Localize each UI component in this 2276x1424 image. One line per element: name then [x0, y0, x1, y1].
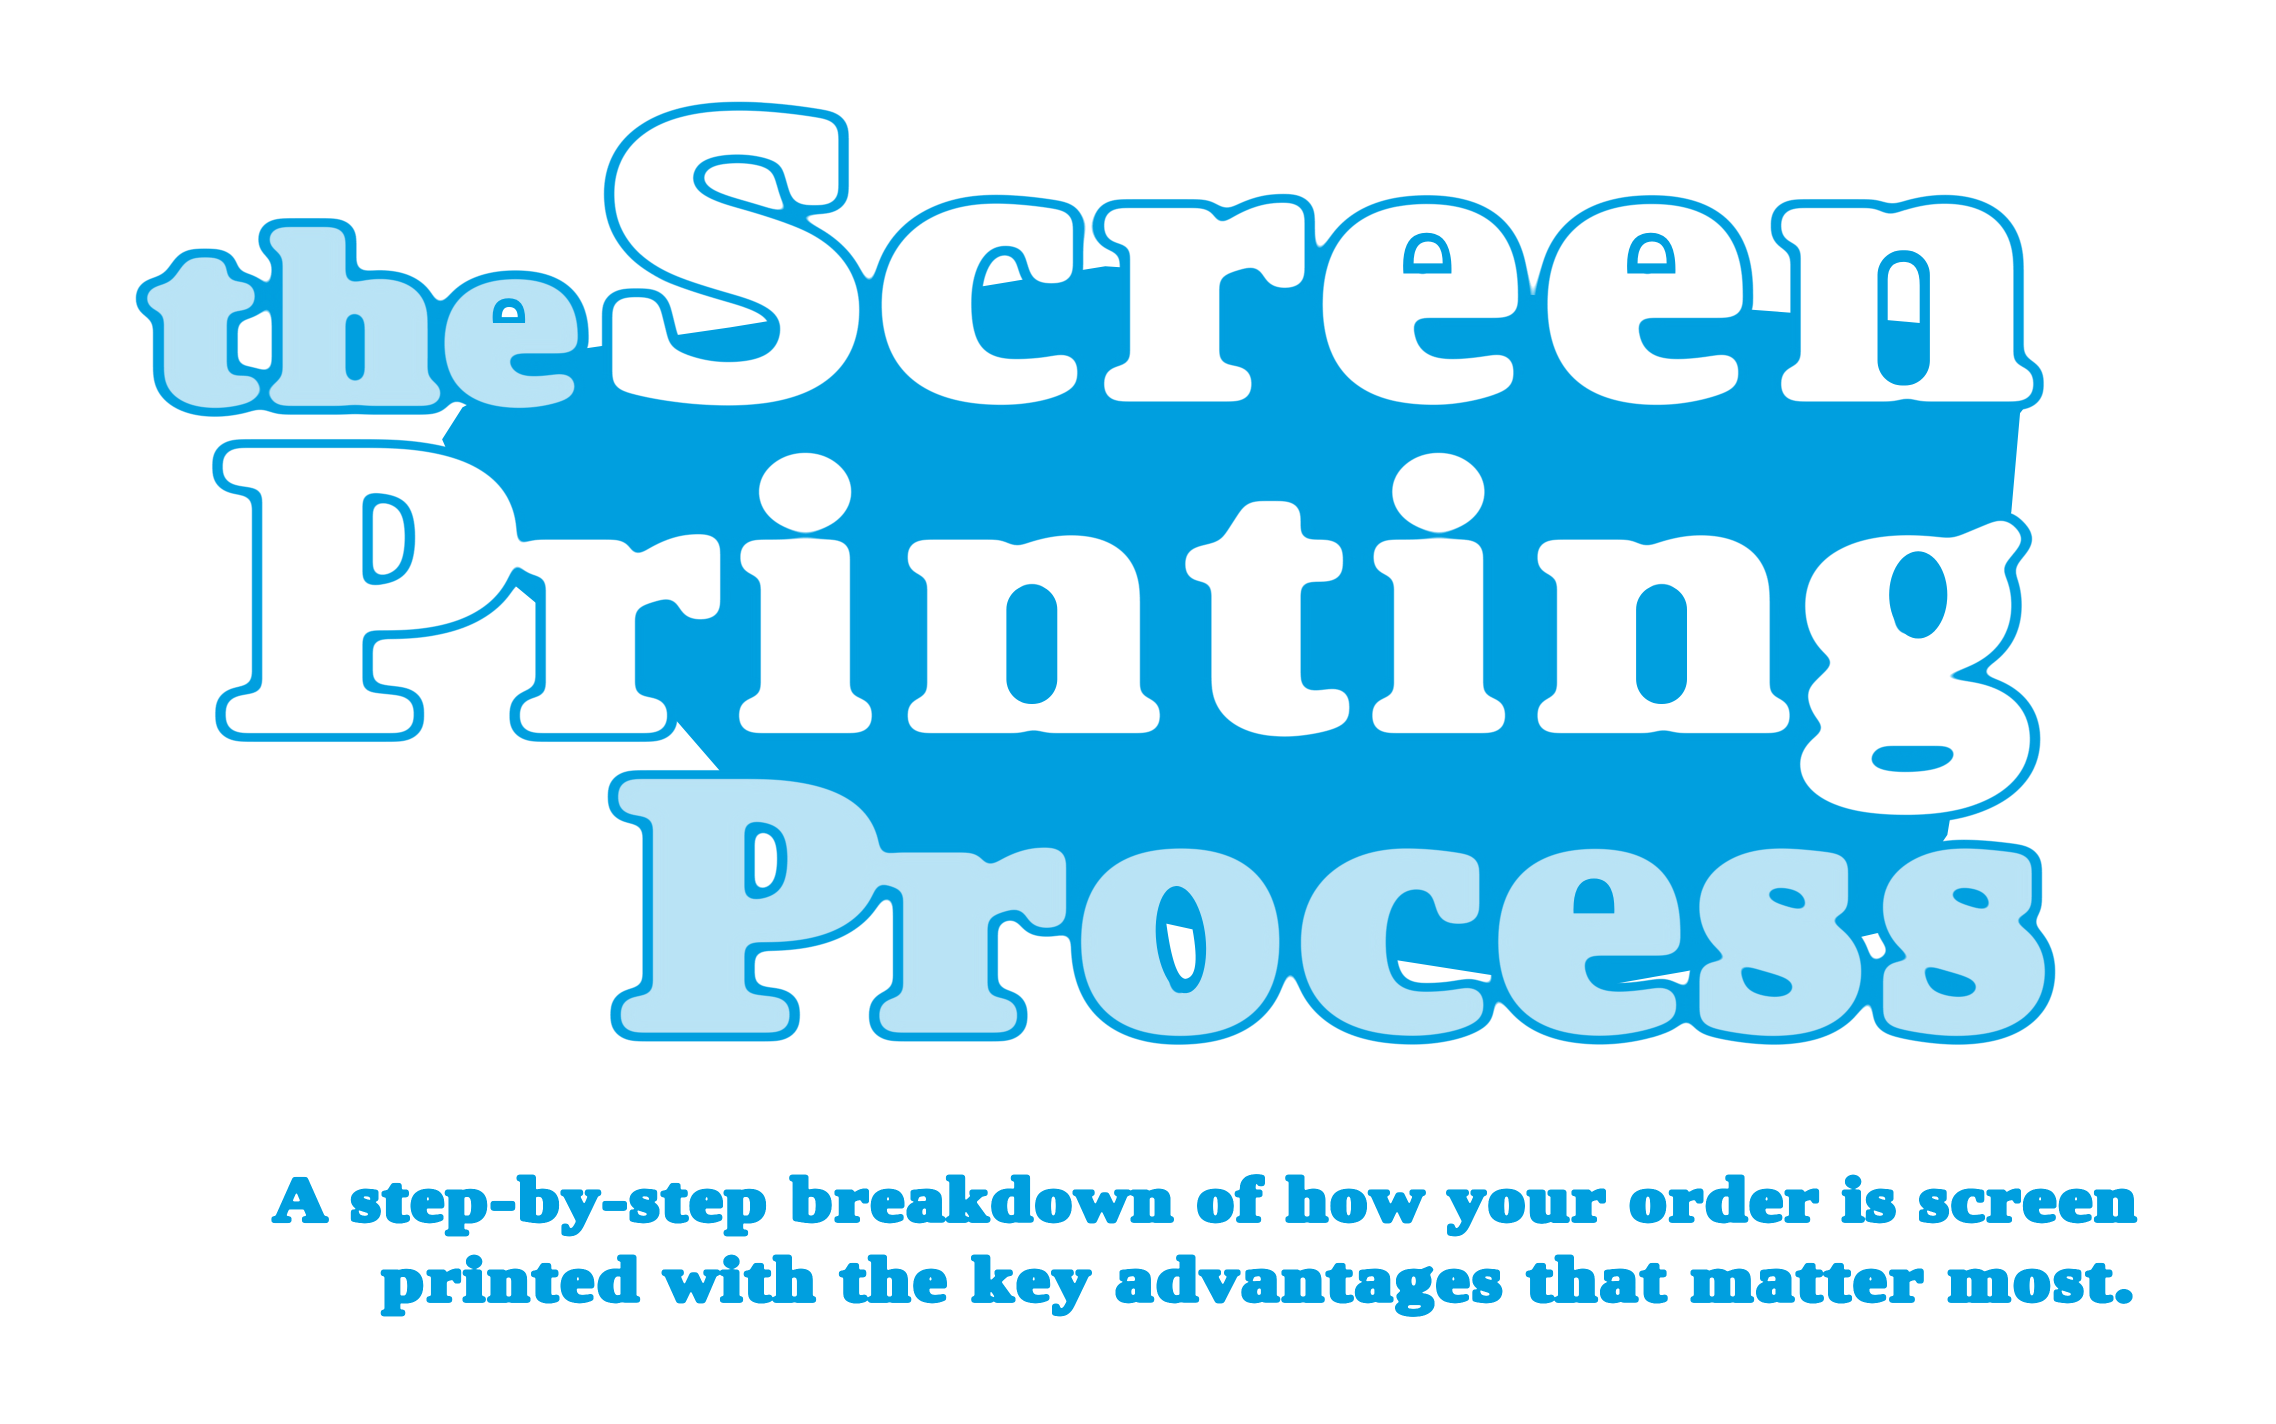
word: Process: P [625, 708, 878, 1098]
word: Screen: S [601, 30, 866, 478]
word: Process: rocess [882, 717, 2041, 1095]
subtitle: printed with the key advantages that matter most. [383, 1244, 2137, 1314]
word: Printing: rinting [522, 391, 2021, 808]
word: Printing: P [228, 365, 517, 808]
word: Process: P [625, 708, 878, 1098]
letter counters [493, 233, 1947, 996]
word: Printing: P [228, 365, 517, 808]
blue background shape [442, 266, 2036, 989]
word: the: the [153, 190, 574, 447]
word: Printing: rinting [522, 391, 2021, 808]
subtitle: A step-by-step breakdown of how your order is screen [273, 1165, 2139, 1234]
word: Screen: S [601, 30, 866, 478]
title [153, 30, 2041, 1098]
word: the: the [153, 190, 574, 447]
word: Process: rocess [882, 717, 2041, 1095]
subtitle [273, 1165, 2139, 1314]
word: Screen: creen [880, 60, 2026, 470]
word: Screen: creen [880, 60, 2026, 470]
